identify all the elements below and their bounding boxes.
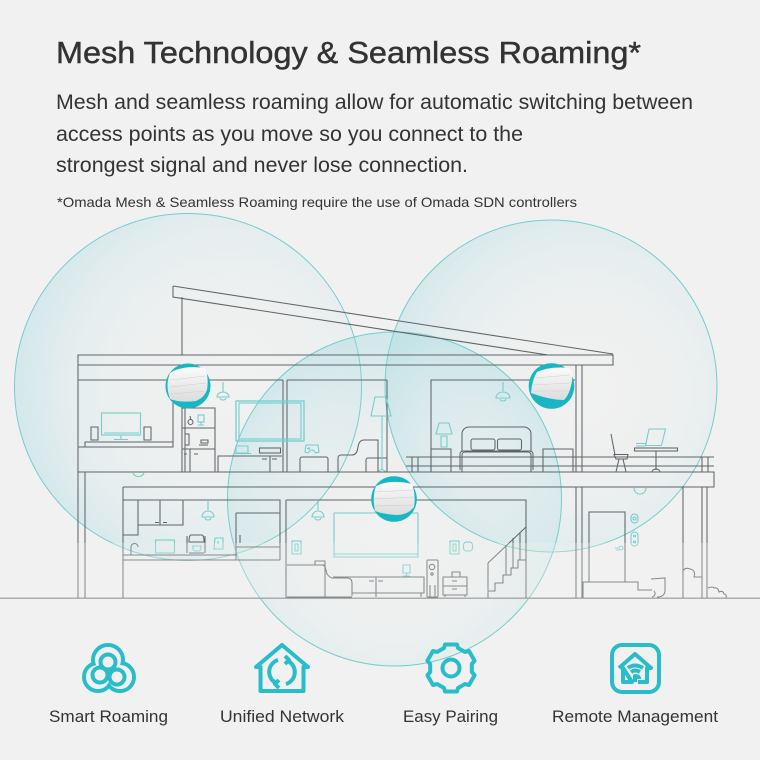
kitchen pendant xyxy=(202,500,214,520)
game controller xyxy=(305,445,319,453)
light switch xyxy=(292,541,301,554)
bed xyxy=(431,427,573,472)
smart lock xyxy=(631,532,638,546)
description text xyxy=(56,91,693,177)
house illustration xyxy=(0,286,760,599)
switch and thermostat xyxy=(450,541,459,554)
door handle xyxy=(615,548,619,550)
doorbell camera xyxy=(631,514,638,523)
coverage circle: middle xyxy=(228,332,562,666)
bedroom furniture xyxy=(431,382,573,472)
lower floor fade xyxy=(0,543,760,597)
description text: access points as you move so you connect to the xyxy=(56,123,523,146)
wall tv xyxy=(334,513,418,557)
bushes xyxy=(683,568,726,598)
mailbox xyxy=(651,578,665,597)
armchair xyxy=(338,440,387,472)
label: remote management: Remote Management xyxy=(552,707,718,726)
icon: remote management xyxy=(612,645,659,692)
tower speaker xyxy=(427,560,438,597)
deck and railing xyxy=(123,457,714,487)
upper floor structure xyxy=(78,365,582,472)
blender xyxy=(214,538,223,549)
staircase xyxy=(488,527,526,598)
ceiling lamp fixtures xyxy=(133,473,646,494)
access point: middle xyxy=(371,476,417,522)
bookshelf xyxy=(182,406,215,472)
icon: smart roaming xyxy=(84,645,134,691)
description text: Mesh and seamless roaming allow for automatic switching between xyxy=(56,91,693,114)
pendant lamp xyxy=(217,382,229,400)
coffee machine xyxy=(187,535,205,553)
microwave xyxy=(156,540,174,553)
label: smart roaming: Smart Roaming xyxy=(49,707,168,726)
monitor and speakers xyxy=(91,413,151,440)
lower floor structure xyxy=(78,472,707,598)
label: easy pairing: Easy Pairing xyxy=(403,707,498,726)
access point: right xyxy=(529,363,574,409)
kitchen cabinets xyxy=(123,500,280,560)
access point: left xyxy=(166,364,210,408)
living room furniture xyxy=(91,382,391,472)
title: Mesh Technology & Seamless Roaming* xyxy=(56,35,641,70)
description text: strongest signal and never lose connection. xyxy=(56,154,468,177)
deck chair and table xyxy=(611,434,678,472)
kitchen xyxy=(123,500,280,560)
bedroom pendant xyxy=(496,382,510,401)
coverage circle: left xyxy=(14,214,362,560)
icon: easy pairing xyxy=(427,644,475,692)
coverage circles xyxy=(14,214,717,666)
lounge xyxy=(287,500,526,598)
footnote: *Omada Mesh & Seamless Roaming require the use of Omada SDN controllers xyxy=(57,194,577,210)
icon: unified network xyxy=(256,645,308,691)
roof and beam xyxy=(78,286,613,365)
coverage circle: right xyxy=(385,220,717,552)
bedside lamp xyxy=(436,423,452,447)
small camera xyxy=(403,565,410,576)
floor lamp xyxy=(371,397,391,472)
nightstand xyxy=(443,572,467,597)
label: unified network: Unified Network xyxy=(220,707,345,726)
laptop xyxy=(636,429,666,446)
sofa and cabinet xyxy=(287,561,424,597)
ground line xyxy=(0,598,760,599)
wall mirror xyxy=(236,401,304,441)
sideboard and console xyxy=(218,448,328,472)
front door xyxy=(583,512,726,598)
lounge pendant xyxy=(312,500,324,520)
